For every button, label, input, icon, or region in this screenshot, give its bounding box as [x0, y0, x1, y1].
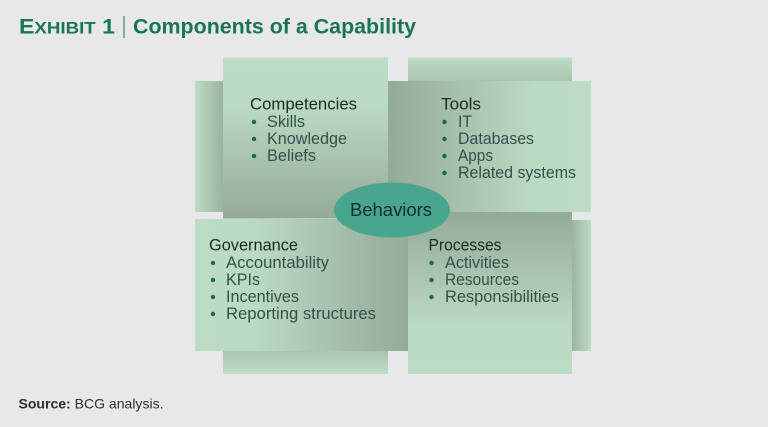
panel: governance: Governance — [209, 236, 298, 254]
panel: governance: Incentives — [226, 287, 299, 306]
source note: Source: BCG analysis. — [18, 396, 164, 412]
title — [19, 16, 416, 38]
panel: processes: Activities — [445, 253, 509, 272]
panel: tools: Related systems — [458, 163, 576, 182]
title: Components of a Capability — [133, 16, 416, 38]
panel: competencies — [223, 58, 388, 218]
panel: processes: Resources — [445, 270, 519, 289]
panel: governance: Accountability — [226, 253, 329, 272]
panel: governance bottom flap — [223, 351, 388, 374]
panel: tools: Tools — [441, 94, 481, 114]
title: EXHIBIT 1 — [19, 16, 115, 38]
center ellipse: behaviors — [334, 182, 450, 238]
panel: tools — [388, 81, 591, 212]
panel: tools: Apps — [458, 146, 493, 165]
panel: governance: KPIs — [226, 270, 260, 289]
panel: tools: IT — [458, 112, 472, 131]
panel: competencies: Skills — [267, 112, 305, 131]
panel: competencies: Competencies — [250, 94, 357, 114]
panel: processes: Responsibilities — [445, 287, 559, 306]
panel: processes side flap — [572, 220, 591, 351]
panel: processes: Processes — [428, 236, 502, 254]
panel: tools top flap — [408, 58, 572, 81]
panel: competencies: Knowledge — [267, 129, 347, 148]
panel: governance: Reporting structures — [226, 304, 376, 323]
panel: competencies side flap — [195, 81, 223, 212]
center ellipse: behaviors: Behaviors — [350, 200, 432, 220]
panel: processes — [408, 212, 572, 374]
panel: competencies: Beliefs — [267, 146, 316, 165]
panel: tools: Databases — [458, 129, 534, 148]
panel: governance — [195, 219, 408, 351]
